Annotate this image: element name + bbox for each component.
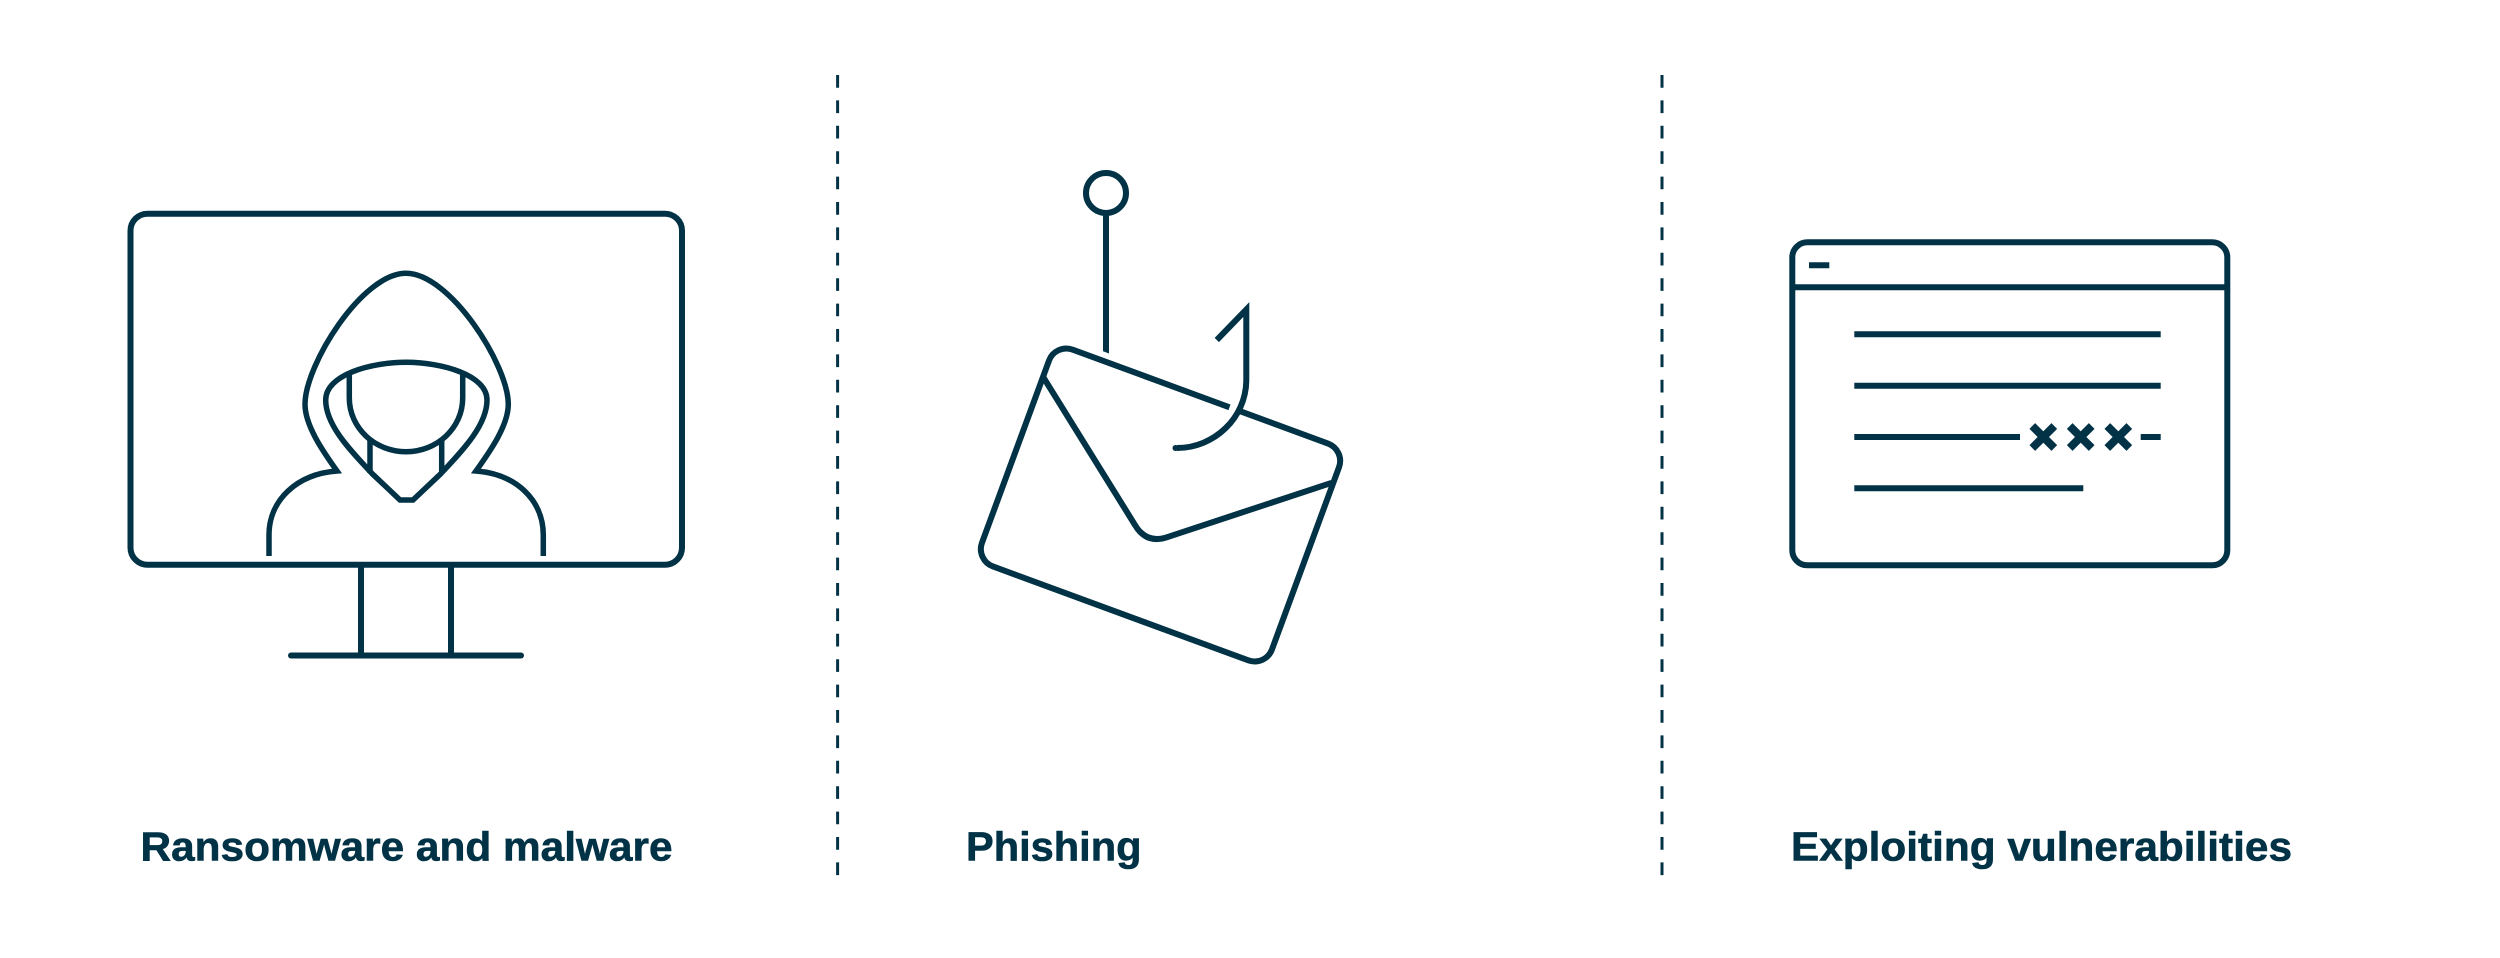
- password asterisks: [2032, 426, 2129, 448]
- icon: envelope on fishing hook: [976, 173, 1345, 667]
- title bar divider: [1792, 284, 2227, 290]
- panel: ransomware and malware: [130, 214, 682, 870]
- monitor stand: [291, 565, 521, 656]
- hook ring: [1086, 173, 1126, 213]
- hook line: [1103, 213, 1109, 354]
- window frame: [1792, 242, 2227, 565]
- icon: browser window with masked password: [1792, 242, 2227, 565]
- title bar dash: [1809, 262, 1829, 268]
- heading: exploiting vulnerabilities: Exploiting vulnerabilities: [1791, 824, 2292, 870]
- envelope body: [976, 343, 1345, 667]
- panel: phishing: [966, 173, 1345, 870]
- icon: monitor with hooded hacker: [130, 214, 682, 655]
- hacker figure: [269, 273, 543, 556]
- divider right: [1660, 75, 1664, 875]
- panel: exploiting vulnerabilities: [1791, 242, 2292, 870]
- heading: phishing: Phishing: [966, 824, 1142, 870]
- envelope flap: [1044, 378, 1332, 539]
- monitor screen: [130, 214, 682, 565]
- hook barb and curve: [1177, 310, 1246, 448]
- divider left: [836, 75, 839, 875]
- heading: ransomware and malware: Ransomware and malware: [140, 824, 672, 870]
- text lines: [1854, 334, 2161, 488]
